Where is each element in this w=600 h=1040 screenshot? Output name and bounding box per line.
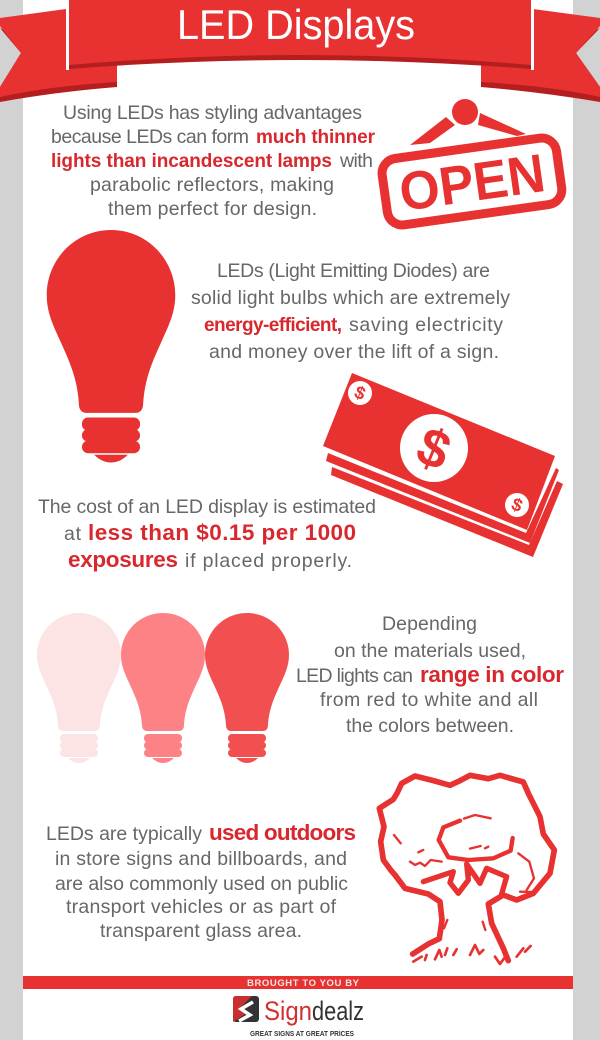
icon: stack of dollar bills: $ [352,382,368,404]
icon: large light bulb [47,230,175,462]
logo: Signdealz: Sign [264,996,312,1026]
text block: used outdoors: LEDs are typically [46,823,202,845]
logo: Signdealz [233,996,364,1038]
logo: Signdealz: dealz [312,996,364,1026]
text block: range in color: on the materials used, [334,640,526,662]
icon: stack of dollar bills [323,373,563,557]
title ribbon banner [0,0,600,102]
text block: energy efficiency: solid light bulbs which are extremely [191,287,510,309]
text block: range in color: range in color [420,662,564,687]
text block: cost per exposures: The cost of an LED display is estimated [38,496,376,518]
text block: styling advantages: Using LEDs has styling advantages [63,102,362,124]
logo: Signdealz: GREAT SIGNS AT GREAT PRICES [250,1029,354,1038]
footer bar: brought to you by [23,976,573,989]
title: LED Displays [177,1,415,48]
text block: energy efficiency: LEDs (Light Emitting Diodes) are [217,260,490,282]
text block: styling advantages: lights than incandescent lamps [51,151,332,172]
icon: tree outline [379,775,554,964]
text block: cost per exposures: at [64,523,82,545]
text block: range in color: from red to white and all [320,689,538,711]
text block: styling advantages [51,102,376,220]
text block: cost per exposures: less than $0.15 per 1000 [88,520,356,545]
text block: styling advantages: parabolic reflectors, making [90,174,334,196]
icon: stack of dollar bills: $ [408,415,459,482]
footer bar: brought to you by: BROUGHT TO YOU BY [247,978,360,989]
text block: range in color [296,613,564,737]
bulb: strong red [205,613,289,763]
centre ribbon band [69,0,531,69]
text block: energy efficiency: and money over the lift of a sign. [209,341,499,363]
icon: open sign [380,99,564,227]
text block: cost per exposures: exposures [68,547,178,572]
text block: used outdoors: are also commonly used on public [55,873,348,895]
text block: used outdoors: used outdoors [209,820,356,845]
text block: styling advantages: with [339,150,373,172]
text block: cost per exposures: if placed properly. [185,550,352,572]
text block: styling advantages: much thinner [256,127,376,148]
text block: used outdoors: transparent glass area. [100,920,302,942]
right ribbon tail [481,9,600,102]
text block: energy efficiency: energy-efficient, [204,315,342,336]
text block: cost per exposures [38,496,376,572]
text block: range in color: the colors between. [346,715,514,737]
bulb: palest pink [37,613,121,763]
text block: energy efficiency: saving electricity [349,314,503,336]
bulb: mid pink [121,613,205,763]
text block: styling advantages: them perfect for design. [108,198,317,220]
text block: used outdoors: transport vehicles or as part of [66,896,337,918]
icon: stack of dollar bills: $ [509,494,525,516]
left ribbon tail [0,9,117,102]
logo icon [233,996,259,1022]
icon: open sign: OPEN [396,143,549,223]
text block: used outdoors [46,820,356,942]
icons: three coloured bulbs [37,613,289,763]
text block: range in color: LED lights can [296,665,413,687]
text block: energy efficiency [191,260,510,363]
text block: used outdoors: in store signs and billboards, and [55,848,347,870]
text block: styling advantages: because LEDs can form [51,126,249,148]
text block: range in color: Depending [382,613,477,635]
